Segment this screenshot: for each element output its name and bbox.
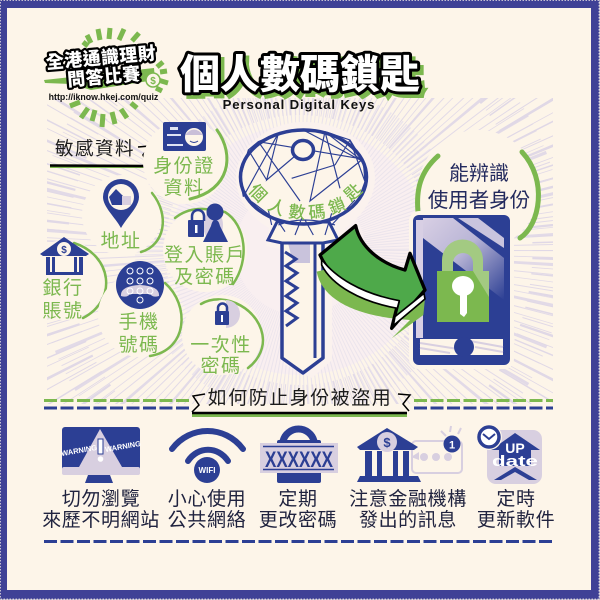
key collar xyxy=(268,222,338,243)
dashed dividers xyxy=(44,400,553,542)
key head xyxy=(240,130,366,235)
tip: bank messages: 發出的訊息 xyxy=(359,509,457,531)
item: login account xyxy=(163,204,247,292)
item: address: 地址 xyxy=(100,230,142,252)
icon: keypad handset xyxy=(116,261,164,309)
icon: wifi: WIFI xyxy=(199,466,215,475)
item: phone number: 手機 xyxy=(118,311,160,333)
panel: sensitive data xyxy=(25,120,263,377)
key label: 碼 xyxy=(308,202,326,223)
item: bank account xyxy=(25,237,106,322)
label: 使用者身份 xyxy=(428,189,530,212)
key halo xyxy=(236,122,375,378)
label xyxy=(428,162,530,212)
tip: bank messages xyxy=(349,426,467,531)
key label: 個 xyxy=(245,181,270,206)
tip: change password: 定期 xyxy=(278,488,318,510)
item: phone number: 號碼 xyxy=(118,334,160,356)
item: bank account: 賬號 xyxy=(42,300,84,322)
item: one-time password: 一次性 xyxy=(190,334,252,356)
icon: warning monitor: WARNING xyxy=(104,439,142,454)
arrow white bands xyxy=(322,259,425,326)
key label xyxy=(245,180,366,223)
subtitle: Personal Digital Keys xyxy=(223,97,375,112)
icon: update: date xyxy=(492,453,538,470)
arc xyxy=(418,152,538,238)
icon: map pin xyxy=(103,179,139,228)
tip: suspicious sites: 來歷不明網站 xyxy=(42,509,160,531)
title: 個人數碼鎖匙 xyxy=(184,57,424,101)
panel: how to prevent identity theft xyxy=(42,387,555,542)
tip: suspicious sites: 切勿瀏覽 xyxy=(62,488,140,510)
item: one-time password: 密碼 xyxy=(200,355,242,377)
heading banner: 如何防止身份被盜用 xyxy=(208,387,392,409)
key blade xyxy=(282,240,323,373)
key label: 匙 xyxy=(341,180,366,205)
item: login account: 及密碼 xyxy=(174,266,236,288)
item: one-time password xyxy=(182,295,263,377)
quiz badge xyxy=(44,28,168,127)
tip: change password: 更改密碼 xyxy=(259,509,337,531)
tip: bank messages: 注意金融機構 xyxy=(349,488,467,510)
icon: update xyxy=(476,424,542,484)
item: ID card xyxy=(143,120,227,204)
item: address xyxy=(82,175,163,255)
icon: ID card xyxy=(163,122,206,151)
heading banner: sensitive data xyxy=(50,138,150,168)
green padlock xyxy=(437,239,489,322)
tip: public wifi: 小心使用 xyxy=(168,488,246,510)
tip: update software xyxy=(476,424,555,531)
icon: lock xyxy=(208,300,240,328)
tip: change password xyxy=(259,429,338,531)
icon: bank and message xyxy=(357,426,462,482)
sunburst background rays xyxy=(47,98,553,404)
tip: public wifi: 公共網絡 xyxy=(168,509,246,531)
badge heading line 1: 全港通識理財 xyxy=(45,42,157,73)
panel: identifies user xyxy=(418,130,538,250)
arrow: key to phone xyxy=(317,226,425,338)
badge green backing xyxy=(44,68,155,90)
tip: update software: 定時 xyxy=(496,488,536,510)
label: 能辨識 xyxy=(449,162,509,185)
item: ID card: 資料 xyxy=(163,177,205,199)
tip: update software: 更新軟件 xyxy=(477,509,555,531)
item: login account: 登入賬戶 xyxy=(164,244,246,266)
key label: 人 xyxy=(265,195,289,220)
icon: digital key xyxy=(236,122,375,378)
title: 個人數碼鎖匙 xyxy=(180,53,420,97)
tip: suspicious sites xyxy=(42,427,160,531)
icon: bank: $ xyxy=(61,245,67,256)
icon: bank and message: 1 xyxy=(449,440,455,452)
icon: smartphone with lock xyxy=(409,211,514,369)
icon: warning monitor: WARNING xyxy=(60,443,98,458)
item: phone number xyxy=(98,261,182,357)
heading banner: sensitive data: 敏感資料 xyxy=(55,138,135,159)
icon: lock and user xyxy=(184,204,228,242)
icon: password lock: XXXXXX xyxy=(265,447,333,472)
badge url: http://iknow.hkej.com/quiz xyxy=(49,92,159,102)
icon: dollar bulb: $ xyxy=(150,76,156,87)
key label: 數 xyxy=(288,202,306,223)
badge rays xyxy=(70,28,168,127)
icon: bank and message: $ xyxy=(383,435,391,450)
badge heading line 2: 問答比賽 xyxy=(66,63,142,90)
key label: 鎖 xyxy=(326,194,349,218)
tip: public wifi xyxy=(168,431,246,531)
item: bank account: 銀行 xyxy=(42,277,84,299)
icon: update: UP xyxy=(505,440,525,456)
icon: warning monitor xyxy=(60,427,142,483)
item: ID card: 身份證 xyxy=(153,155,215,177)
heading banner xyxy=(192,387,410,417)
arrow shadow xyxy=(317,268,425,338)
arrow body xyxy=(320,226,425,328)
phone gloss xyxy=(416,220,423,338)
